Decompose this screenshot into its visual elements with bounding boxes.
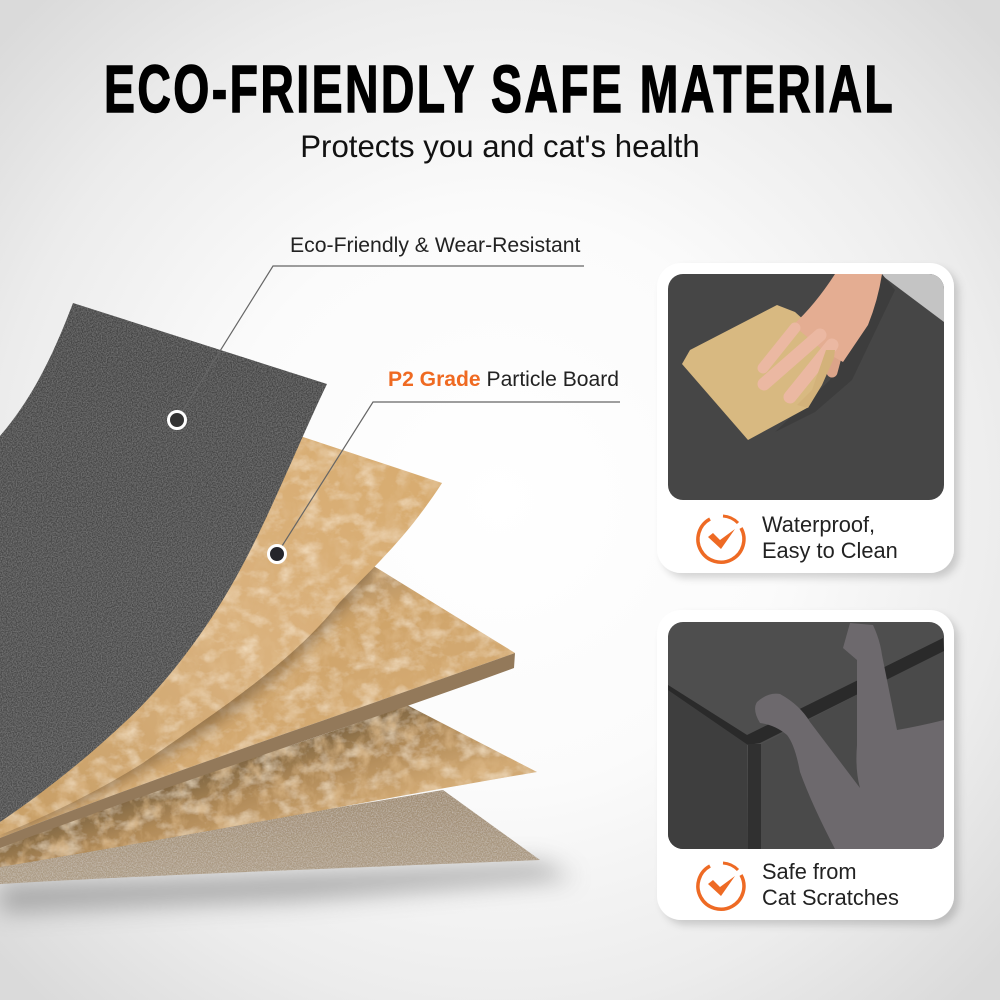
hand — [793, 274, 882, 362]
photo: hand wiping surface — [668, 274, 944, 500]
sheet: bottom fibre layer — [0, 790, 540, 884]
leader line: particle board — [277, 402, 620, 554]
illustration: layered board sheets — [0, 303, 540, 884]
floor shadow — [0, 862, 575, 912]
caption: waterproof — [762, 512, 898, 563]
sheet: top wood layer — [0, 436, 442, 835]
marker: laminate — [168, 412, 186, 428]
caption: safe from scratches — [762, 859, 899, 910]
label: particle board: P2 Grade Particle Board — [388, 368, 619, 391]
card: waterproof — [657, 263, 954, 573]
hand shadow — [775, 274, 895, 432]
cat — [755, 623, 944, 849]
sheet: black laminate — [0, 303, 327, 822]
leader line: laminate — [177, 266, 584, 420]
photo: cat on cabinet — [668, 622, 944, 849]
sheet: middle wood layer — [0, 565, 515, 848]
card: scratches — [657, 610, 954, 920]
subtitle: Protects you and cat's health — [300, 129, 700, 164]
cloth — [682, 305, 835, 440]
cloth fold — [807, 350, 835, 408]
shadow cast by top sheet — [0, 566, 378, 838]
caption: waterproof: Waterproof, — [762, 512, 875, 537]
title: ECO-FRIENDLY SAFE MATERIAL — [104, 52, 896, 127]
icon: check badge 1 — [698, 516, 744, 562]
caption: waterproof: Easy to Clean — [762, 538, 898, 563]
sheet: lower wood layer — [0, 705, 537, 867]
fingers — [763, 328, 832, 397]
caption: safe from scratches: Safe from — [762, 859, 856, 884]
pinky — [832, 342, 840, 372]
caption: safe from scratches: Cat Scratches — [762, 885, 899, 910]
icon: check badge 2 — [698, 863, 744, 909]
label: eco-friendly layer: Eco-Friendly & Wear-Resistant — [290, 234, 580, 257]
marker: particle board — [268, 546, 286, 562]
